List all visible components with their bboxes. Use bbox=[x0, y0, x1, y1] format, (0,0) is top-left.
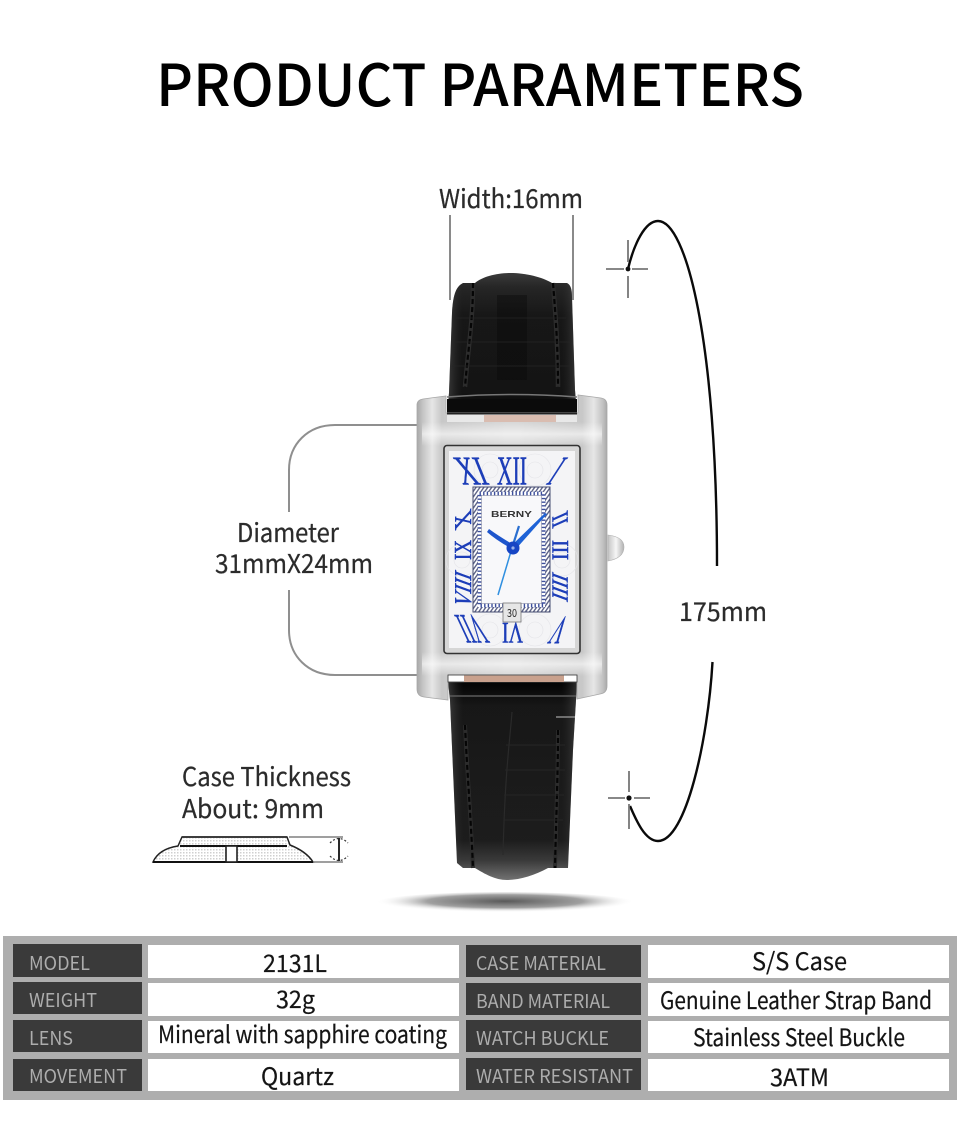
row: band material: BAND MATERIAL bbox=[476, 987, 610, 1014]
crown bbox=[608, 535, 624, 561]
row: weight: WEIGHT bbox=[29, 986, 97, 1013]
numerals bbox=[448, 448, 575, 652]
row: movement bbox=[13, 1057, 459, 1092]
label: diameter: 31mmX24mm bbox=[215, 544, 373, 581]
numerals: IIII bbox=[547, 569, 572, 604]
numerals: XI bbox=[448, 449, 494, 494]
row: case material bbox=[466, 942, 949, 978]
specification table bbox=[3, 936, 957, 1100]
row: case material: S/S Case bbox=[752, 942, 847, 977]
row: water resistant bbox=[466, 1058, 949, 1093]
numerals: I bbox=[539, 448, 575, 494]
minute track bbox=[473, 487, 550, 612]
row: lens: Mineral with sapphire coating bbox=[158, 1015, 447, 1050]
row: model: 2131L bbox=[263, 944, 327, 979]
arc: total length top bbox=[606, 221, 717, 566]
row: lens: LENS bbox=[29, 1024, 73, 1051]
numerals: XII bbox=[497, 448, 527, 494]
date window bbox=[503, 603, 521, 622]
row: weight: 32g bbox=[276, 980, 315, 1015]
label: case thickness: About: 9mm bbox=[182, 789, 324, 826]
watch shadow bbox=[375, 892, 635, 914]
watch bbox=[417, 273, 624, 880]
numerals: VIII bbox=[451, 568, 477, 611]
arc: total length bottom bbox=[608, 662, 712, 841]
dial bbox=[444, 446, 580, 654]
numerals: III bbox=[548, 540, 572, 560]
row: model: MODEL bbox=[29, 949, 90, 976]
row: lens bbox=[13, 1015, 459, 1053]
numerals: VI bbox=[502, 616, 523, 649]
row: water resistant: 3ATM bbox=[770, 1058, 829, 1093]
label: total length: 175mm bbox=[679, 592, 767, 629]
row: band material bbox=[466, 981, 949, 1016]
row: water resistant: WATER RESISTANT bbox=[476, 1062, 633, 1089]
row: movement: Quartz bbox=[261, 1057, 334, 1092]
bracket: case diameter bbox=[289, 425, 417, 675]
date window: 30 bbox=[507, 605, 517, 621]
row: watch buckle bbox=[466, 1018, 949, 1053]
numerals: V bbox=[543, 608, 575, 652]
hands bbox=[487, 513, 547, 595]
row: movement: MOVEMENT bbox=[29, 1062, 127, 1089]
label: case thickness bbox=[182, 757, 351, 826]
row: model bbox=[13, 944, 459, 979]
numerals: II bbox=[547, 508, 572, 532]
title: PRODUCT PARAMETERS bbox=[156, 39, 804, 123]
case bbox=[417, 395, 607, 700]
icon: case side profile bbox=[153, 837, 348, 862]
row: watch buckle: WATCH BUCKLE bbox=[476, 1024, 609, 1051]
label: diameter: Diameter bbox=[237, 513, 340, 550]
numerals: X bbox=[450, 506, 477, 534]
row: watch buckle: Stainless Steel Buckle bbox=[693, 1018, 905, 1053]
label: case thickness: Case Thickness bbox=[182, 757, 351, 794]
strap: lower bbox=[448, 682, 577, 880]
label: strap width: Width:16mm bbox=[439, 179, 583, 216]
numerals: IX bbox=[451, 540, 477, 560]
label: diameter bbox=[215, 513, 373, 581]
numerals: VII bbox=[449, 606, 495, 652]
row: weight bbox=[13, 980, 459, 1016]
brand: BERNY bbox=[491, 509, 532, 519]
strap: upper bbox=[447, 273, 577, 414]
row: case material: CASE MATERIAL bbox=[476, 949, 606, 976]
